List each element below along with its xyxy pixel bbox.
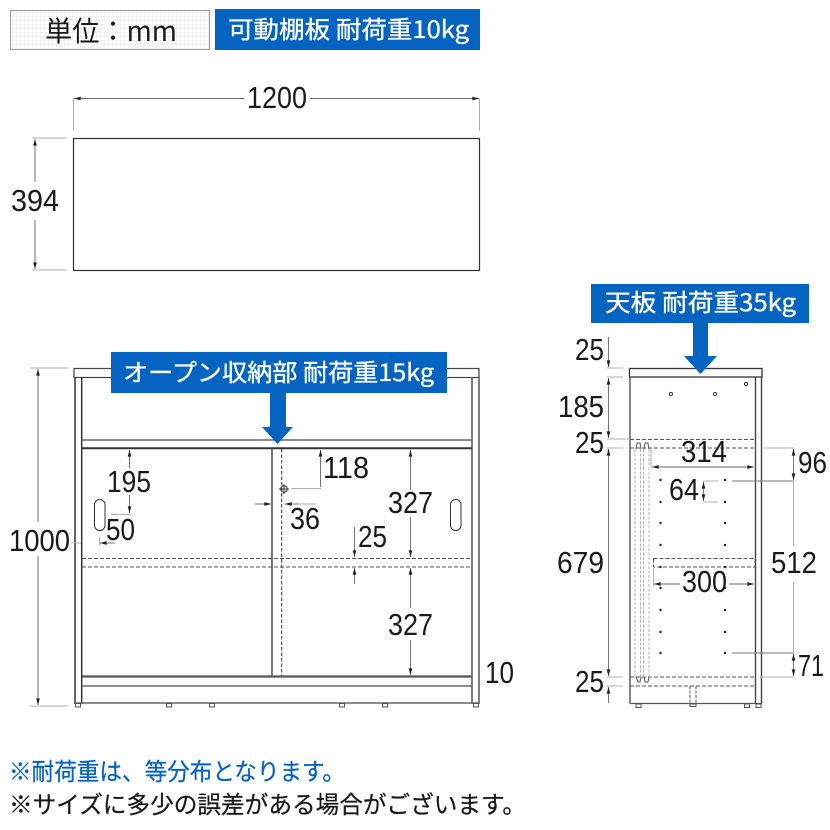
width dimension 1200: 1200 — [247, 80, 307, 115]
dimension 25 upper: 25 — [575, 425, 604, 460]
dimension 314: 314 — [681, 434, 727, 469]
dimension 300: 300 — [682, 564, 727, 599]
dimension 195 — [107, 450, 151, 514]
dimension 25 top: 25 — [575, 332, 604, 367]
dimension 327 upper: 327 — [388, 485, 433, 520]
dimension 185: 185 — [558, 389, 604, 424]
dimension 36: 36 — [290, 501, 320, 536]
unit label — [10, 10, 210, 50]
dimension 25 upper — [575, 425, 630, 460]
cabinet body — [74, 368, 479, 704]
arrow: open storage load — [262, 393, 293, 444]
dimension 327 lower — [388, 568, 433, 675]
dimension 25 — [354, 519, 387, 584]
handle: left — [94, 500, 105, 530]
feet — [636, 686, 761, 708]
arrow: top board load — [684, 323, 717, 374]
dimension 327 lower: 327 — [388, 607, 433, 642]
dimension 314 — [651, 434, 754, 469]
dimension 185 — [558, 378, 608, 438]
label: open storage load: オープン収納部 耐荷重15kg — [123, 353, 434, 388]
shelf pin dots — [659, 479, 726, 654]
diagram: shelf board plan view — [11, 80, 480, 270]
dimension 195: 195 — [107, 464, 151, 499]
feet — [76, 704, 478, 707]
note: blue load note: ※耐荷重は、等分布となります。 — [9, 752, 345, 787]
depth dimension 394 — [11, 138, 67, 270]
unit label: 単位：mm — [45, 10, 177, 50]
dimension 25 lower — [575, 664, 623, 703]
screw holes — [669, 382, 748, 396]
dimension 50: 50 — [106, 512, 135, 547]
dimension 1000 — [9, 368, 81, 706]
dimension 25 lower: 25 — [575, 664, 604, 699]
label: movable shelf load: 可動棚板 耐荷重10kg — [228, 10, 469, 45]
lock hole — [279, 484, 289, 494]
diagram: front view — [9, 352, 514, 707]
dimension 512: 512 — [771, 545, 817, 580]
dimension 36 — [255, 501, 320, 536]
dimension 118 — [291, 450, 369, 488]
dimension 64: 64 — [669, 472, 699, 507]
dimension 300 — [654, 564, 754, 599]
movable shelf section — [654, 558, 755, 567]
dimension 10: 10 — [485, 655, 514, 690]
dimension 327 upper — [388, 450, 433, 557]
dimension 679: 679 — [557, 545, 604, 580]
shelf board outline — [74, 138, 480, 270]
cabinet body — [630, 368, 762, 704]
dimension 25 top — [575, 332, 623, 377]
note: black tolerance note: ※サイズに多少の誤差がある場合がございます。 — [9, 785, 526, 820]
dimension 96 — [732, 445, 827, 481]
dimension 25: 25 — [358, 519, 387, 554]
handle: right — [450, 500, 461, 530]
dimension 71 — [732, 648, 824, 683]
label: top board load: 天板 耐荷重35kg — [605, 283, 796, 318]
dimension 118: 118 — [323, 450, 369, 485]
shelf pin rails — [635, 443, 649, 682]
depth dimension 394: 394 — [11, 183, 59, 218]
width dimension 1200 — [74, 80, 480, 131]
diagram: side view — [557, 283, 827, 708]
dimension 1000: 1000 — [9, 523, 70, 558]
